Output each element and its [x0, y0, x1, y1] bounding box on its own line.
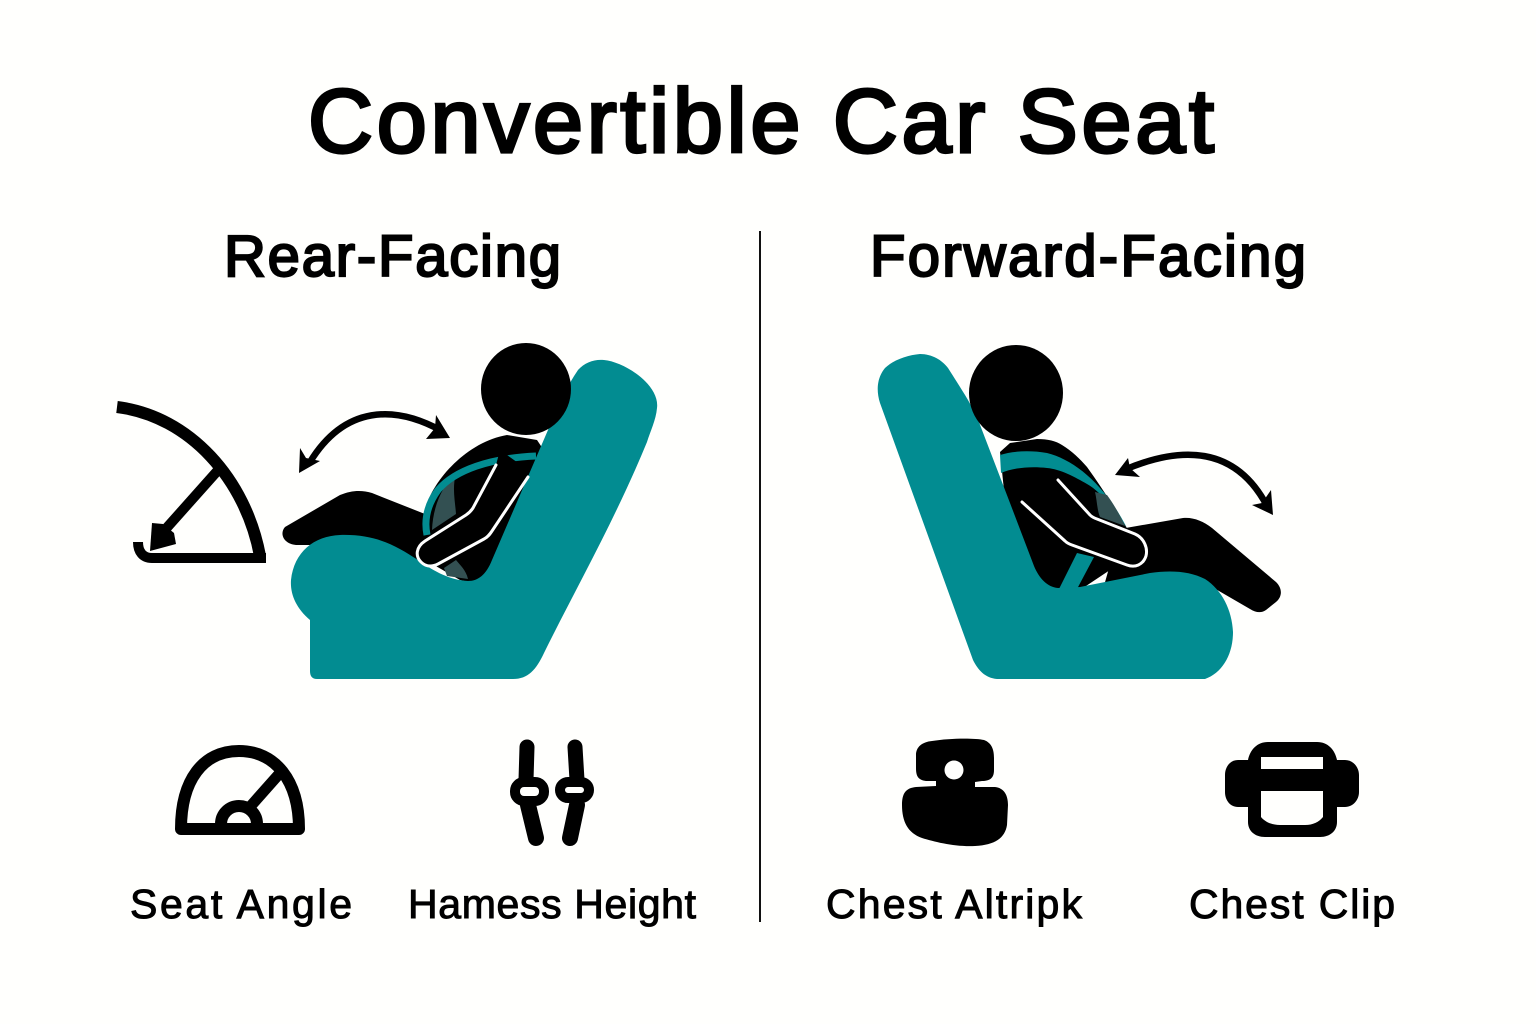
- seat: [878, 354, 1233, 679]
- child head: [481, 343, 571, 435]
- seat: [291, 360, 657, 679]
- child head: [969, 345, 1063, 441]
- icon: seat angle dial with arrow: [117, 407, 266, 558]
- icon: harness height straps: [515, 747, 589, 838]
- arrow: double curved recline: [299, 414, 450, 473]
- label: chest altrip: Chest Altripk: [826, 881, 1082, 927]
- child torso: [1000, 439, 1128, 590]
- harness strap: [1000, 451, 1127, 589]
- harness strap: [426, 456, 536, 579]
- title: Convertible Car Seat: [308, 72, 1214, 172]
- child arm: [417, 450, 528, 566]
- arrow: double curved recline: [1115, 455, 1273, 515]
- label: harness height: Hamess Height: [408, 881, 697, 927]
- icon: chest altrip: [902, 739, 1008, 846]
- label: chest clip: Chest Clip: [1189, 881, 1395, 927]
- heading: forward-facing: Forward-Facing: [870, 224, 1306, 289]
- label: seat angle: Seat Angle: [130, 881, 352, 927]
- child legs: [1100, 518, 1281, 612]
- icon: seat angle gauge: [181, 751, 299, 829]
- child torso: [422, 435, 545, 581]
- child arm: [1022, 470, 1147, 566]
- heading: rear-facing: Rear-Facing: [224, 224, 561, 289]
- icon: chest clip: [1225, 742, 1359, 837]
- panel: rear-facing illustration: [117, 343, 657, 679]
- panel: forward-facing illustration: [878, 345, 1281, 679]
- child legs: [282, 491, 430, 560]
